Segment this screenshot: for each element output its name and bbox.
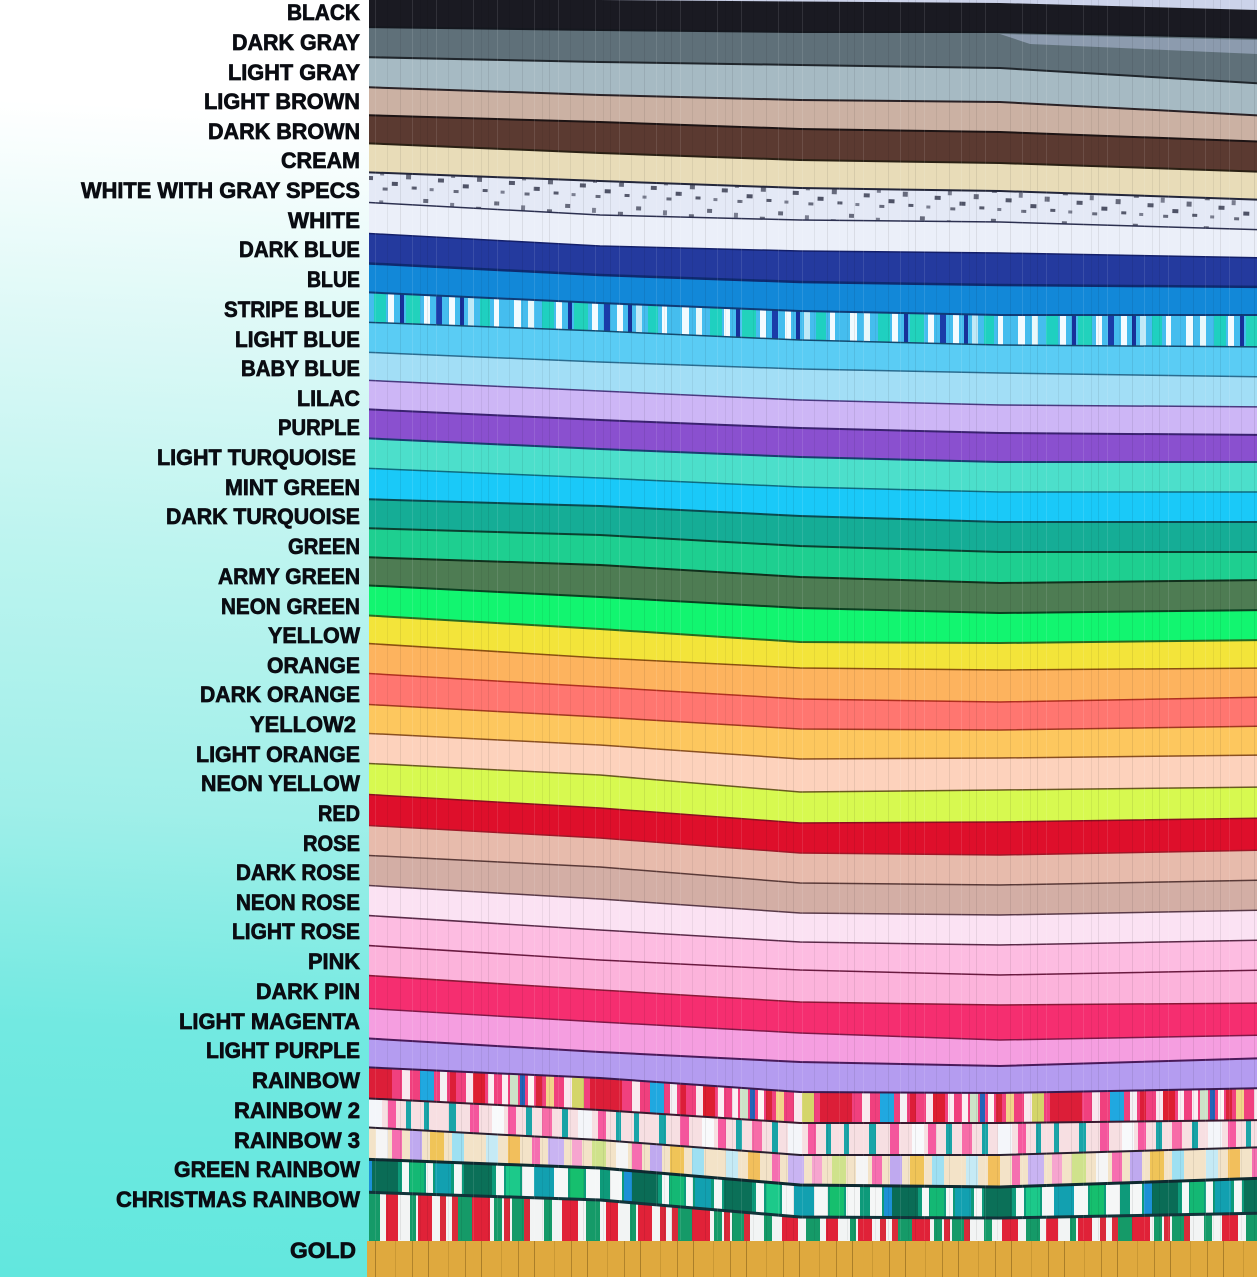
- strand: army green: [369, 556, 1257, 612]
- background gradient panel: [0, 0, 370, 1277]
- label: rose: ROSE: [303, 831, 360, 856]
- label: light rose: LIGHT ROSE: [232, 919, 360, 944]
- strand: green: [369, 527, 1257, 582]
- strand: dark pink: [369, 974, 1257, 1040]
- label: orange: ORANGE: [267, 653, 360, 678]
- strand: red: [369, 794, 1257, 854]
- strand: black: [369, 0, 1257, 37]
- strand: light orange: [369, 732, 1257, 792]
- label: light gray: LIGHT GRAY: [228, 60, 360, 85]
- strand: dark orange: [369, 672, 1257, 730]
- strand: light brown: [369, 86, 1257, 140]
- strand: purple: [369, 408, 1257, 461]
- strand: yellow 2: [369, 704, 1257, 758]
- strand: light rose: [369, 914, 1257, 974]
- label: light orange: LIGHT ORANGE: [196, 742, 360, 767]
- strand: pink: [369, 944, 1257, 1004]
- strand: neon green: [369, 584, 1257, 642]
- strand: light purple: [369, 1038, 1257, 1092]
- label: green rainbow: GREEN RAINBOW: [174, 1157, 360, 1182]
- label: dark rose: DARK ROSE: [236, 860, 360, 885]
- label: rainbow 2: RAINBOW 2: [234, 1098, 360, 1123]
- label: dark gray: DARK GRAY: [232, 30, 360, 55]
- label: army green: ARMY GREEN: [218, 564, 360, 589]
- label: dark orange: DARK ORANGE: [200, 682, 360, 707]
- strand: dark brown: [369, 114, 1257, 171]
- label: green: GREEN: [288, 534, 360, 559]
- strand: yellow: [369, 614, 1257, 670]
- strand: dark gray: [369, 28, 1257, 82]
- label: yellow 2: YELLOW2: [250, 712, 356, 737]
- label: yellow: YELLOW: [268, 623, 360, 648]
- label: mint green: MINT GREEN: [225, 475, 360, 500]
- strand: baby blue: [369, 352, 1257, 406]
- strand: light gray: [369, 56, 1257, 114]
- panel: bead strands: [360, 0, 1257, 1277]
- strand: neon rose: [369, 884, 1257, 944]
- strand: light magenta: [369, 1008, 1257, 1065]
- label: light magenta: LIGHT MAGENTA: [179, 1009, 360, 1034]
- strand: rainbow: [369, 1066, 1257, 1122]
- strand: green rainbow: [360, 1159, 1257, 1277]
- strand: lilac: [369, 380, 1257, 434]
- label: neon rose: NEON ROSE: [236, 890, 360, 915]
- label: light blue: LIGHT BLUE: [235, 327, 360, 352]
- label: christmas rainbow: CHRISTMAS RAINBOW: [116, 1187, 360, 1212]
- label: white: WHITE: [288, 208, 360, 233]
- label: red: RED: [318, 801, 360, 826]
- strand: rose: [369, 824, 1257, 884]
- strand: stripe blue: [369, 291, 1257, 346]
- label: neon yellow: NEON YELLOW: [201, 771, 360, 796]
- label: light brown: LIGHT BROWN: [204, 89, 360, 114]
- label: dark pin: DARK PIN: [256, 979, 360, 1004]
- label: purple: PURPLE: [278, 415, 360, 440]
- strand: cream: [369, 142, 1257, 199]
- strand: light turquoise: [369, 437, 1257, 492]
- label: blue: BLUE: [307, 267, 360, 292]
- strand: white with gray specs: [369, 171, 1257, 229]
- strand: dark rose: [369, 854, 1257, 914]
- label: neon green: NEON GREEN: [221, 594, 360, 619]
- strand: mint green: [369, 468, 1257, 521]
- strand: orange: [369, 642, 1257, 702]
- strand: white: [369, 202, 1257, 256]
- label: pink: PINK: [308, 949, 360, 974]
- label: stripe blue: STRIPE BLUE: [224, 297, 360, 322]
- label: light turquoise: LIGHT TURQUOISE: [157, 445, 356, 470]
- label: white with gray specs: WHITE WITH GRAY SPECS: [81, 178, 360, 203]
- colour name labels: [81, 0, 360, 1263]
- label: rainbow: RAINBOW: [252, 1068, 360, 1093]
- strand: dark turquoise: [369, 498, 1257, 551]
- strand: gold: [367, 1241, 1257, 1277]
- label: dark brown: DARK BROWN: [208, 119, 360, 144]
- strand: rainbow 2: [369, 1098, 1257, 1154]
- strand: dark blue: [369, 232, 1257, 286]
- label: black: BLACK: [287, 0, 360, 25]
- label: lilac: LILAC: [297, 386, 360, 411]
- label: rainbow 3: RAINBOW 3: [234, 1128, 360, 1153]
- label: dark turquoise: DARK TURQUOISE: [166, 504, 360, 529]
- label: baby blue: BABY BLUE: [241, 356, 360, 381]
- label: dark blue: DARK BLUE: [239, 237, 360, 262]
- strand: blue: [369, 262, 1257, 314]
- strand: neon yellow: [369, 762, 1257, 822]
- label: gold: GOLD: [290, 1238, 356, 1263]
- strand: christmas rainbow: [360, 1192, 1257, 1277]
- label: light purple: LIGHT PURPLE: [206, 1038, 360, 1063]
- strand: light blue: [369, 322, 1257, 376]
- label: cream: CREAM: [281, 148, 360, 173]
- strand: rainbow 3: [369, 1126, 1257, 1186]
